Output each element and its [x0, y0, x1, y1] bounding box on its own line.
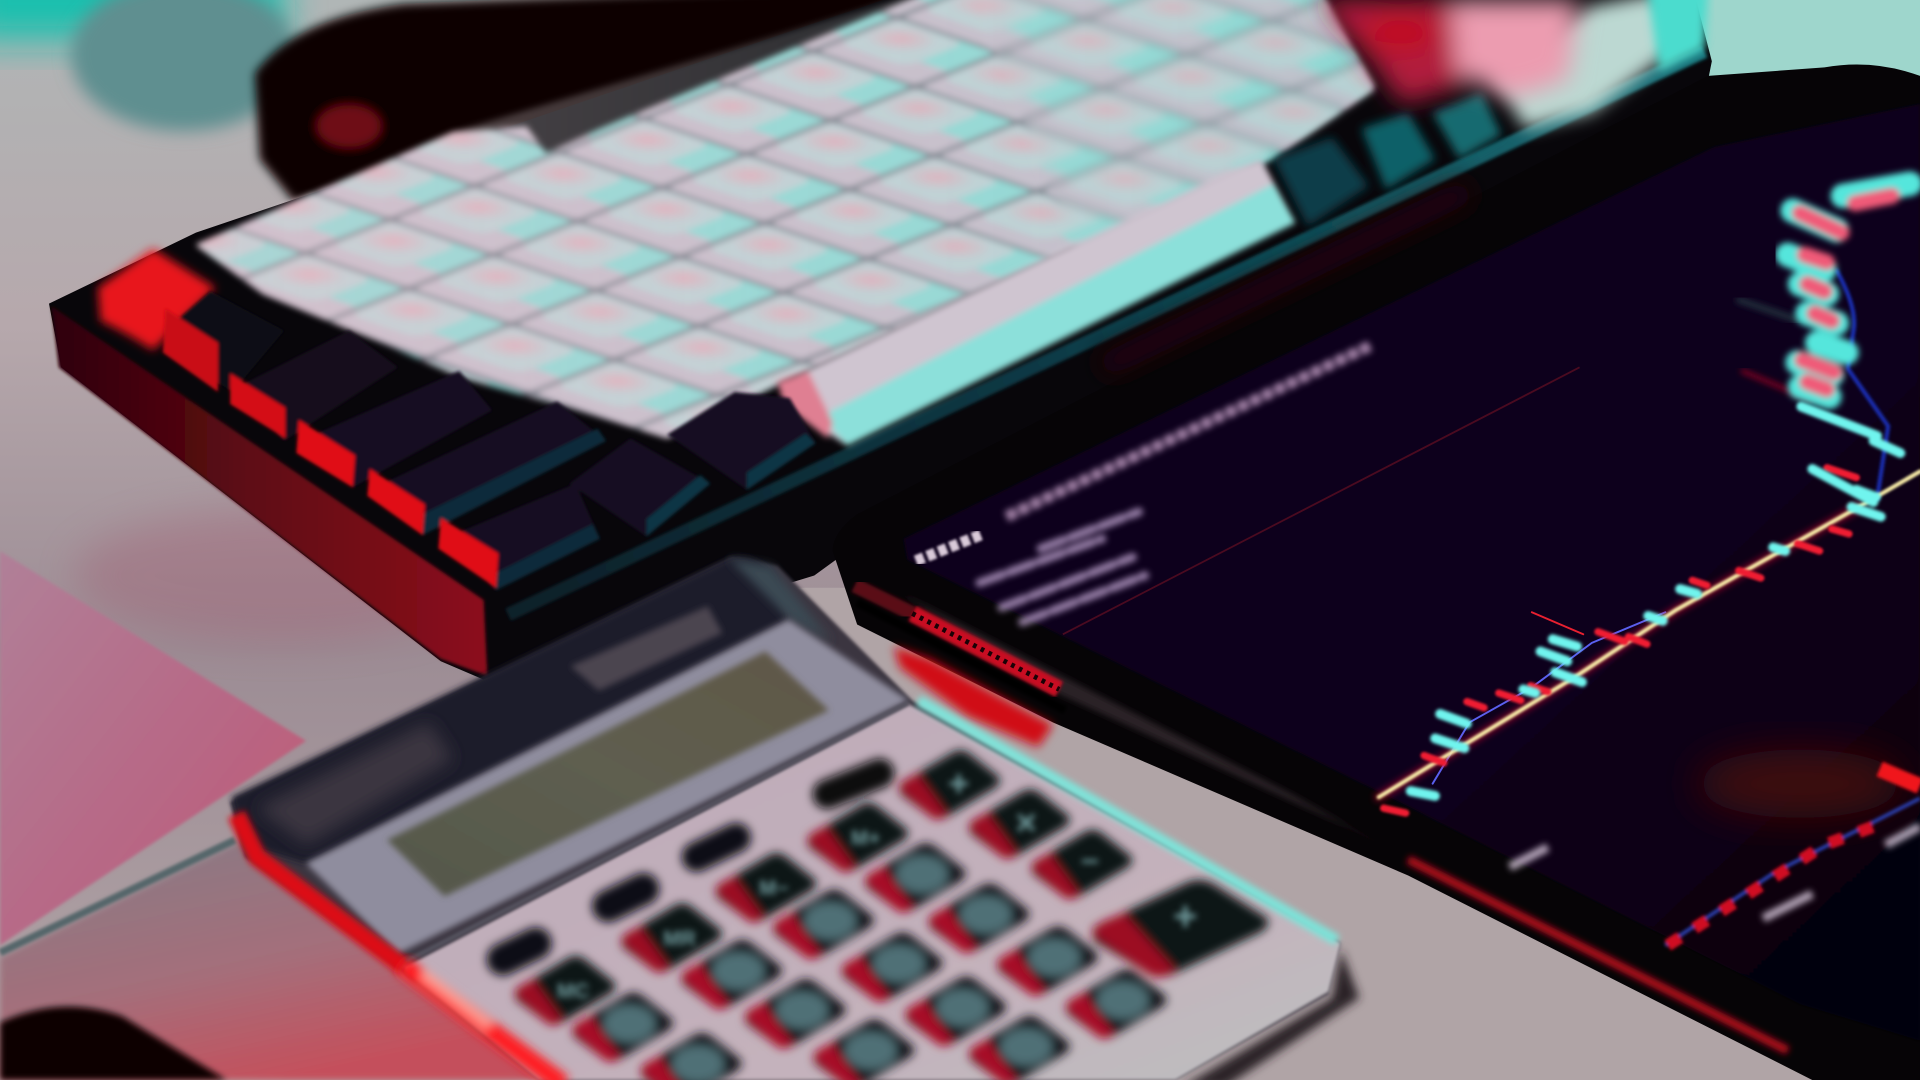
- pale keys at far corner: [1494, 0, 1700, 129]
- key legends: M−: [759, 877, 789, 900]
- key legends: +: [1173, 893, 1197, 940]
- panel right corner: [729, 558, 833, 643]
- calculator keys: [481, 750, 1268, 1080]
- cyan candles: [1411, 407, 1900, 796]
- blurred dark wick: [1739, 300, 1800, 321]
- key legends: MC: [557, 980, 589, 1003]
- plate bright red corner: [402, 965, 563, 1080]
- solar panel: [571, 606, 722, 691]
- plate teal edge: [918, 700, 1337, 940]
- panel left smear: [257, 722, 453, 845]
- key legends: +: [948, 763, 970, 804]
- oval keys: [808, 754, 899, 813]
- blue average curve: [1433, 612, 1665, 784]
- key legends: [557, 763, 1197, 1003]
- red port edge: [912, 613, 1059, 689]
- monitor stand base: [71, 0, 296, 131]
- tablet red edge: [1408, 860, 1788, 1051]
- red lower edge: [236, 814, 404, 967]
- key plate: [404, 704, 1341, 1080]
- front teal edge: [508, 51, 1704, 615]
- mouse pad: [0, 551, 306, 945]
- operator keys: [899, 750, 1000, 820]
- upper candle stack: [1788, 184, 1910, 397]
- tablet screen: [904, 104, 1920, 1041]
- dim port edge: [855, 585, 912, 613]
- blurred screen heading: [1007, 345, 1371, 517]
- red candles: [1384, 468, 1856, 813]
- desk edge line: [0, 840, 235, 953]
- white key colour wash: [196, 0, 1374, 438]
- blurred screen label: [916, 534, 983, 561]
- trend line red halo: [1379, 507, 1859, 797]
- price chart: [1379, 184, 1920, 813]
- screen red glow: [1696, 749, 1904, 818]
- key legends: ×: [1015, 802, 1037, 843]
- calculator: [230, 557, 1359, 1080]
- function keys: [807, 803, 908, 872]
- thin screen guide line: [1063, 367, 1580, 634]
- blurred red wick: [1742, 371, 1812, 400]
- tablet: [833, 64, 1920, 1080]
- key legends: −: [1080, 843, 1099, 879]
- spacebar: [778, 159, 1296, 446]
- red escape key: [98, 249, 216, 350]
- bright teal corner: [1647, 0, 1708, 71]
- calculator body: [230, 557, 1341, 1080]
- dark object behind keyboard: [255, 0, 955, 202]
- speaker grille: [912, 613, 1059, 689]
- keyboard red side: [51, 306, 487, 676]
- number keys: [864, 843, 966, 913]
- calculator display: [387, 651, 829, 896]
- plus key: [1091, 880, 1268, 977]
- plate frame shadow: [407, 703, 909, 961]
- blurred red between keyboard and screen: [1102, 190, 1469, 367]
- pink accent keys: [1316, 0, 1580, 104]
- yellow trend line: [1379, 471, 1920, 797]
- tablet bezel: [900, 593, 1408, 860]
- white key field: [196, 0, 1374, 438]
- display frame: [306, 620, 909, 954]
- blurred axis labels: [1510, 827, 1920, 918]
- lower screen chart: [1665, 769, 1920, 945]
- black tablet seam: [857, 602, 1065, 710]
- dark top panel: [231, 557, 789, 863]
- key legends: M+: [851, 827, 880, 850]
- black object bottom-left: [0, 1007, 227, 1080]
- far key field, softer focus: [967, 0, 1374, 251]
- right-side dark keys: [1273, 93, 1501, 227]
- tablet body: [833, 64, 1920, 1080]
- black modifier keys: [163, 291, 816, 590]
- calculator shadow: [1182, 949, 1359, 1080]
- keyboard body: [49, 0, 1712, 680]
- red reflection under tablet: [894, 647, 1053, 747]
- blurred screen data lines: [980, 512, 1145, 622]
- red wicks: [1532, 612, 1583, 634]
- key legends: MR: [663, 927, 696, 950]
- upper blue curve: [1837, 271, 1888, 498]
- lower-left desk: [0, 842, 551, 1080]
- keyboard: [49, 0, 1712, 680]
